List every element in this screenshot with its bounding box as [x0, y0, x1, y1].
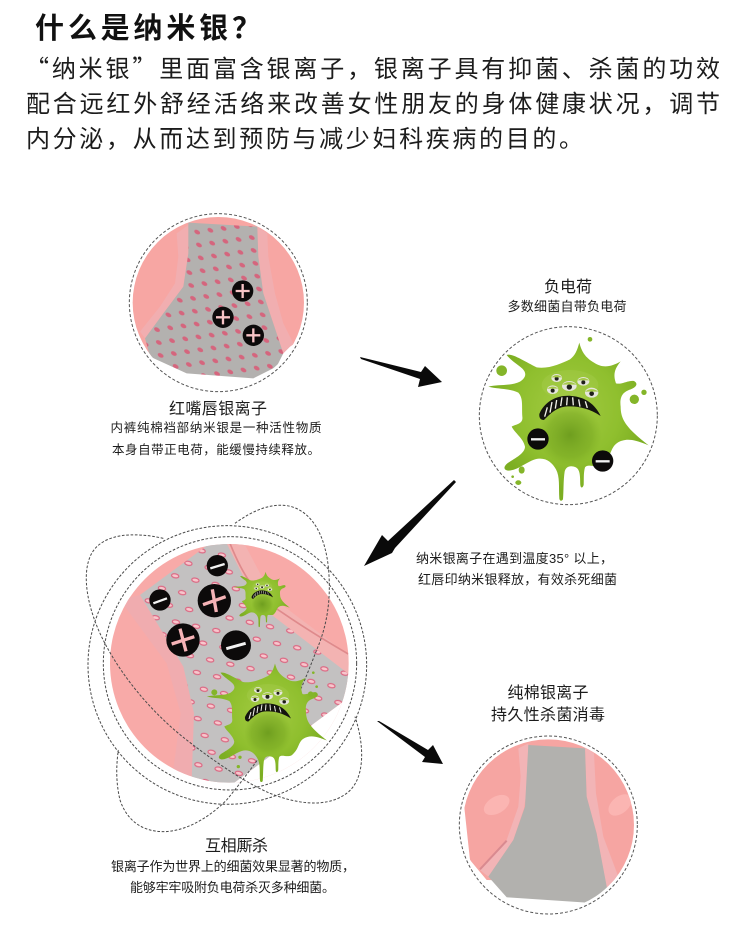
title: 什么是纳米银？: [35, 5, 261, 47]
caption heading: 负电荷: [544, 278, 592, 296]
intro text block: [25, 49, 720, 154]
caption: negative charge: [508, 278, 626, 314]
arrow: fight to cotton: [377, 721, 443, 764]
panel: red lips silver ion fabric: [128, 213, 308, 392]
caption line 1: 内裤纯棉裆部纳米银是一种活性物质: [110, 420, 322, 435]
caption line 2: 能够牢牢吸附负电荷杀灭多种细菌。: [130, 880, 335, 895]
positive charge icons: [212, 280, 264, 346]
caption heading: 红嘴唇银离子: [169, 400, 267, 418]
intro line 2: 配合远红外舒经活络来改善女性朋友的身体健康状况，调节: [26, 84, 720, 119]
caption line 2: 红唇印纳米银释放，有效杀死细菌: [418, 572, 617, 587]
caption: mutual killing: [111, 837, 355, 895]
icon: bacteria: [488, 343, 649, 501]
panel: green bacteria: [479, 327, 657, 505]
dashed circle outline: [479, 327, 657, 505]
negative charge icons: [527, 428, 613, 472]
dashed circle outline: [459, 736, 637, 914]
caption: temperature release: [416, 551, 617, 587]
caption subtext: 多数细菌自带负电荷: [508, 299, 626, 314]
panel: plain cotton fabric: [457, 736, 640, 914]
charge icons: [149, 555, 251, 660]
caption heading: 互相厮杀: [205, 837, 268, 855]
caption: red lips silver ions: [110, 400, 322, 457]
caption line 1: 纳米银离子在遇到温度35° 以上，: [416, 551, 613, 566]
fabric photo: [132, 217, 304, 378]
droplets: [496, 337, 647, 485]
caption: cotton silver ions: [491, 684, 605, 724]
fabric photo: [110, 544, 349, 783]
droplets: [211, 671, 318, 768]
panel: silver ions fighting bacteria: [86, 505, 367, 832]
intro line 3: 内分泌，从而达到预防与减少妇科疾病的目的。: [26, 119, 583, 154]
intro line 1: “纳米银”里面富含银离子，银离子具有抑菌、杀菌的功效: [25, 49, 720, 84]
dashed orbit rings: [86, 505, 367, 832]
icon: small bacteria: [234, 572, 290, 627]
caption line 2: 本身自带正电荷，能缓慢持续释放。: [112, 442, 320, 457]
dashed circle outline: [129, 214, 307, 392]
caption line 1: 银离子作为世界上的细菌效果显著的物质，: [111, 859, 355, 874]
fabric photo: [457, 737, 640, 903]
caption heading line 2: 持久性杀菌消毒: [491, 706, 605, 724]
caption heading line 1: 纯棉银离子: [508, 684, 588, 702]
icon: large bacteria: [207, 663, 327, 782]
arrow: lips to bacteria: [360, 357, 442, 387]
arrow: bacteria to fight: [364, 480, 456, 566]
